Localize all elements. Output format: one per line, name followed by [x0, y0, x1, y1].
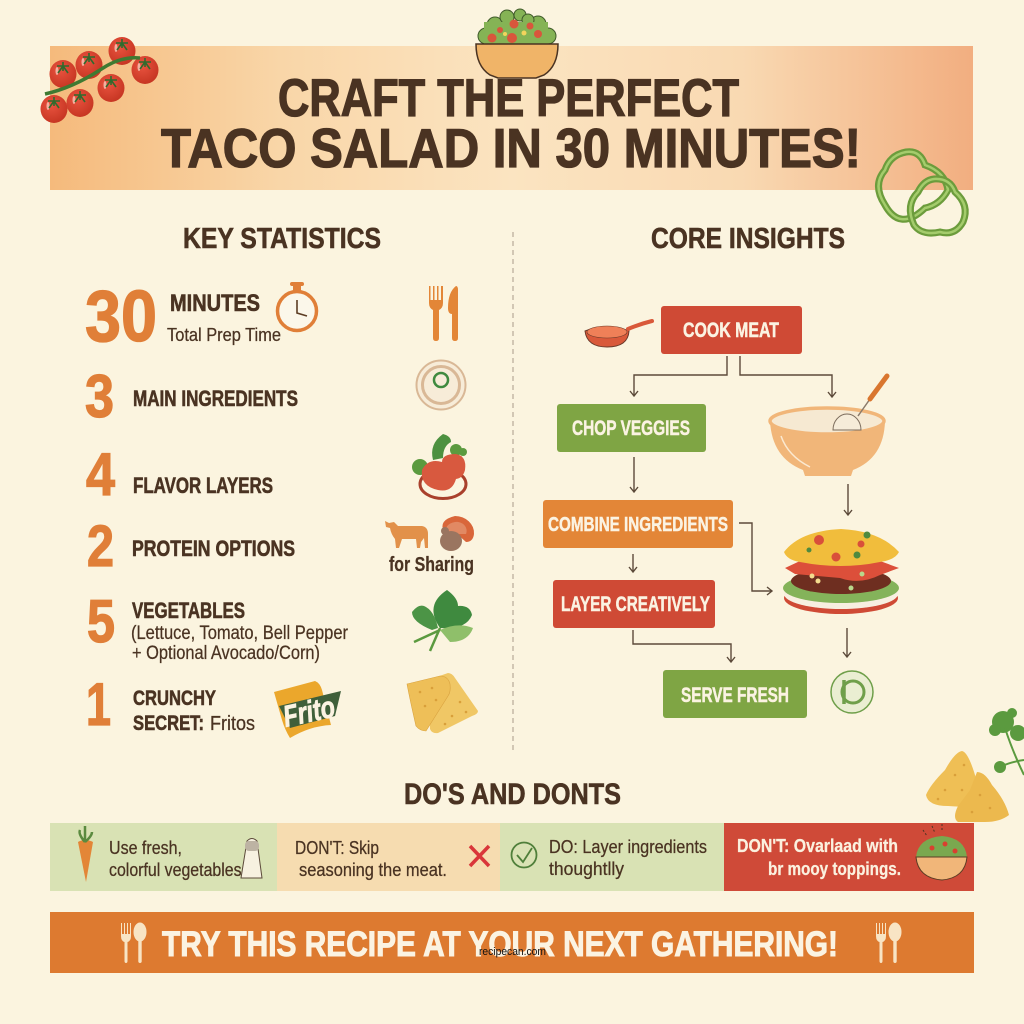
icon: stopwatch: [278, 282, 316, 330]
icon: tortilla chips: [926, 751, 1009, 822]
arrow: combine to burger: [739, 523, 772, 595]
card: don't skip seasoning: [277, 823, 500, 891]
arrow: combine to layer: [629, 554, 637, 572]
stat: 1 crunchy secret: [86, 671, 255, 738]
icon: plate with fork: [831, 671, 873, 713]
icon: turkey: [440, 516, 474, 551]
stat: 30 minutes: MINUTES: [170, 290, 260, 317]
card: don't overload: [724, 823, 974, 891]
icon: meat and vegetables: [412, 434, 467, 498]
card: don't overload: DON'T: Ovarlaad with: [737, 836, 898, 856]
call to action banner: [50, 912, 974, 973]
icon: mixing bowl with spoon: [770, 376, 887, 476]
step: serve fresh: SERVE FRESH: [681, 684, 789, 707]
stat: 1 crunchy secret: SECRET:: [133, 712, 204, 735]
card: don't skip seasoning: DON'T: Skip: [295, 838, 379, 858]
stat: 30 minutes: 30: [85, 277, 157, 357]
heading: dos and donts: DO'S AND DONTS: [404, 778, 621, 811]
title: [161, 69, 861, 179]
icon: frito logo: [274, 681, 341, 738]
stat: 5 vegetables: [87, 588, 349, 664]
watermark: recipecan.com: [479, 946, 546, 958]
stat: 2 protein options: 2: [87, 514, 114, 579]
stat: 1 crunchy secret: 1: [86, 671, 111, 738]
stat: 4 flavor layers: [86, 441, 273, 508]
step: combine ingredients: COMBINE INGREDIENTS: [548, 514, 728, 536]
icon: right cutlery: [876, 922, 902, 963]
step: layer creatively: LAYER CREATIVELY: [561, 593, 710, 616]
stat: 4 flavor layers: FLAVOR LAYERS: [133, 473, 273, 498]
step: chop veggies: [557, 404, 706, 452]
icon: layered taco salad: [783, 529, 899, 614]
stat: 3 main ingredients: [85, 363, 298, 430]
heading: core insights: CORE INSIGHTS: [651, 223, 845, 255]
icon: frito logo: Frito: [280, 691, 338, 734]
panel: dos and donts strip: [50, 823, 974, 891]
card: do layer ingredients: thoughtlly: [549, 859, 624, 879]
stat: 4 flavor layers: 4: [86, 441, 116, 508]
card: use fresh vegetables: Use fresh,: [109, 838, 182, 858]
stat: 5 vegetables: 5: [87, 588, 115, 655]
title: TACO SALAD IN 30 MINUTES!: [161, 117, 861, 179]
step: layer creatively: [553, 580, 715, 628]
arrow: layer to serve: [633, 630, 735, 662]
stat: 30 minutes: [85, 277, 281, 357]
arrow: chop veggies to combine: [630, 457, 638, 492]
stat: 30 minutes: Total Prep Time: [167, 325, 281, 345]
icon: cow: [385, 521, 428, 548]
stat: 1 crunchy secret: Fritos: [210, 713, 255, 735]
step: chop veggies: CHOP VEGGIES: [572, 417, 690, 440]
arrow: cook meat to chop veggies: [630, 356, 727, 396]
panel: core insights flowchart: [543, 306, 899, 718]
icon: cilantro: [989, 708, 1024, 775]
icon: green pepper rings: [878, 152, 965, 233]
step: cook meat: [661, 306, 802, 354]
arrow: cook meat to bowl: [740, 356, 836, 397]
icon: cherry tomatoes on vine: [40, 37, 158, 123]
panel: key statistics: [85, 277, 478, 738]
stat: 2 protein options: PROTEIN OPTIONS: [132, 536, 295, 561]
icon: frying pan: [585, 321, 652, 347]
card: don't skip seasoning: seasoning the meat.: [299, 860, 447, 880]
card: do layer ingredients: DO: Layer ingredients: [549, 837, 707, 857]
icon: salad bowl: [476, 9, 558, 78]
step: cook meat: COOK MEAT: [683, 319, 779, 342]
card: do layer ingredients: [500, 823, 724, 891]
card: use fresh vegetables: [50, 823, 277, 891]
icon: plate: [416, 360, 466, 410]
text: for sharing: for Sharing: [389, 554, 474, 576]
icon: corn chips: [407, 673, 478, 733]
icon: fork and knife: [429, 286, 458, 341]
icon: left cutlery: [121, 922, 146, 963]
stat: 5 vegetables: + Optional Avocado/Corn): [132, 643, 320, 664]
call to action banner: TRY THIS RECIPE AT YOUR NEXT GATHERING!: [162, 925, 838, 964]
heading: key statistics: KEY STATISTICS: [183, 223, 381, 255]
card: use fresh vegetables: colorful vegetables,: [109, 860, 246, 880]
title: CRAFT THE PERFECT: [278, 69, 739, 128]
title banner: [50, 46, 973, 190]
stat: 3 main ingredients: 3: [85, 363, 114, 430]
stat: 5 vegetables: VEGETABLES: [132, 598, 245, 623]
stat: 1 crunchy secret: CRUNCHY: [133, 687, 216, 710]
stat: 5 vegetables: (Lettuce, Tomato, Bell Pepper: [131, 623, 349, 644]
step: serve fresh: [663, 670, 807, 718]
arrow: burger to plate: [843, 628, 851, 657]
arrow: bowl to burger: [844, 484, 852, 515]
icon: spinach leaves: [412, 590, 473, 651]
step: combine ingredients: [543, 500, 733, 548]
stat: 3 main ingredients: MAIN INGREDIENTS: [133, 386, 298, 411]
card: don't overload: br mooy toppings.: [768, 859, 901, 879]
stat: 2 protein options: [87, 514, 295, 579]
